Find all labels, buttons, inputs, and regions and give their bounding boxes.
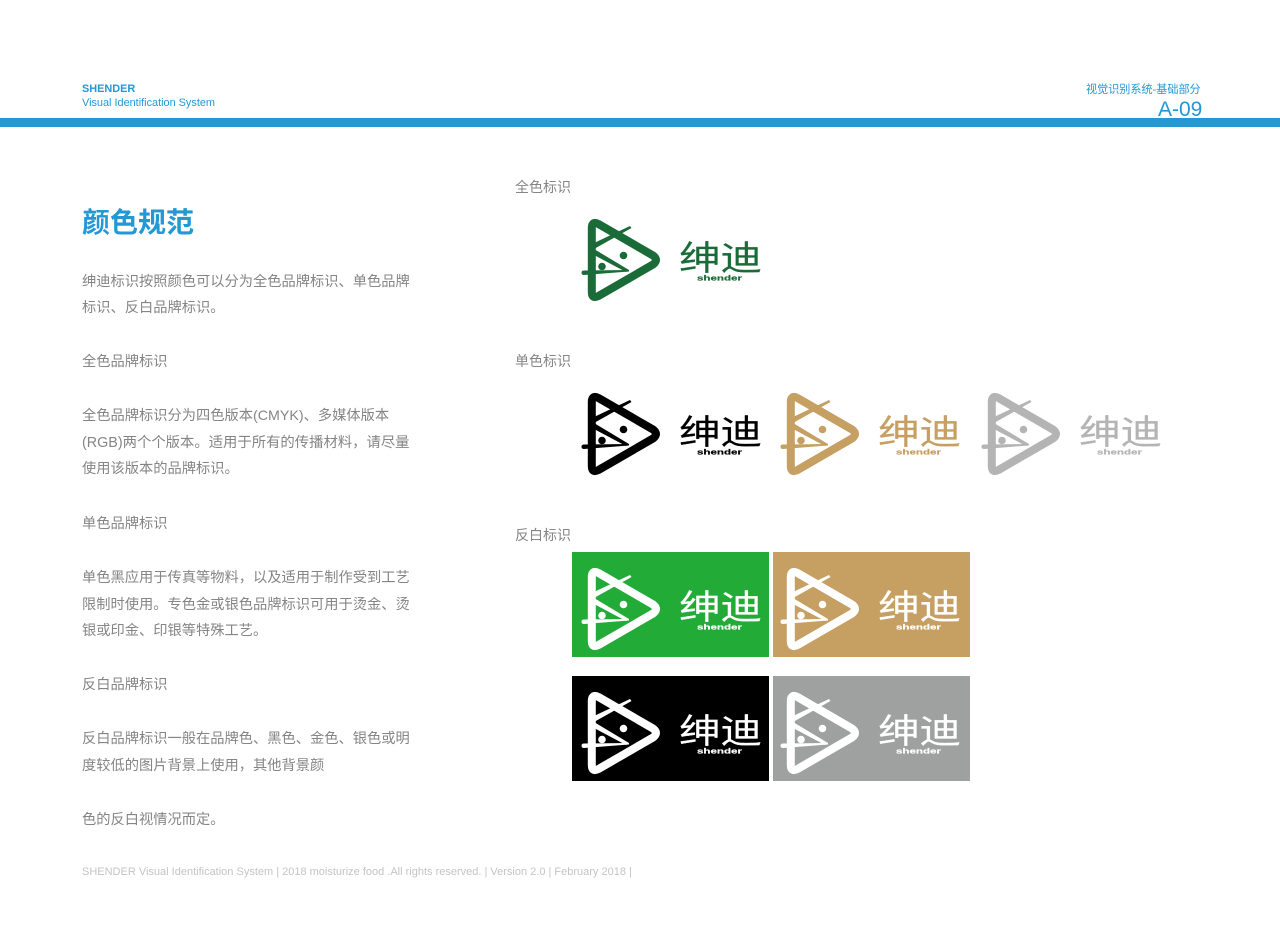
header: brand name bbox=[82, 83, 215, 108]
body text: 绅迪标识按照颜色可以分为全色品牌标识、单色品牌 bbox=[82, 274, 410, 290]
body text: 标识、反白品牌标识。 bbox=[82, 300, 225, 316]
reversed logo on silver: 绅迪 bbox=[878, 704, 961, 753]
header: brand name: Visual Identification System bbox=[82, 96, 215, 108]
reversed logo on black bbox=[572, 676, 769, 781]
body text: 单色黑应用于传真等物料，以及适用于制作受到工艺 bbox=[82, 570, 410, 586]
heading: full colour logo: 全色标识 bbox=[515, 179, 571, 195]
reversed logo on silver: shender bbox=[896, 746, 941, 756]
body text: 全色品牌标识 bbox=[82, 354, 168, 370]
body text: 度较低的图片背景上使用，其他背景颜 bbox=[82, 758, 324, 774]
body text: 单色品牌标识 bbox=[82, 516, 168, 532]
logo: single colour gold: shender bbox=[896, 448, 941, 456]
header: page number: A-09 bbox=[1158, 98, 1202, 121]
reversed logo on green bbox=[572, 552, 769, 657]
reversed logo on gold: shender bbox=[896, 622, 941, 632]
logo: full colour green bbox=[582, 223, 762, 297]
logo: single colour black: 绅迪 bbox=[679, 405, 762, 454]
heading: single colour logo: 单色标识 bbox=[515, 353, 571, 369]
logo: single colour silver: 绅迪 bbox=[1079, 405, 1162, 454]
body text: 银或印金、印银等特殊工艺。 bbox=[82, 623, 267, 639]
body text: (RGB)两个个版本。适用于所有的传播材料，请尽量 bbox=[82, 435, 410, 451]
logo: single colour black: shender bbox=[697, 448, 742, 456]
title: 颜色规范 bbox=[82, 207, 194, 238]
header: section name: 视觉识别系统-基础部分 bbox=[1086, 84, 1201, 96]
logo: single colour black bbox=[582, 397, 762, 471]
logo: full colour green: shender bbox=[697, 274, 742, 282]
reversed logo on silver bbox=[773, 676, 970, 781]
header: brand name: SHENDER bbox=[82, 83, 135, 95]
body text bbox=[82, 274, 410, 828]
heading: reversed logo: 反白标识 bbox=[515, 527, 571, 543]
reversed logo on green: shender bbox=[697, 622, 742, 632]
logo: single colour silver: shender bbox=[1097, 448, 1142, 456]
body text: 全色品牌标识分为四色版本(CMYK)、多媒体版本 bbox=[82, 408, 389, 424]
reversed logo on green: 绅迪 bbox=[679, 580, 762, 629]
reversed logo on black: 绅迪 bbox=[679, 704, 762, 753]
header bar bbox=[0, 118, 1280, 127]
body text: 使用该版本的品牌标识。 bbox=[82, 461, 239, 477]
body text: 反白品牌标识一般在品牌色、黑色、金色、银色或明 bbox=[82, 731, 410, 747]
reversed logo on black: shender bbox=[697, 746, 742, 756]
logo: single colour silver bbox=[982, 397, 1162, 471]
footer text: SHENDER Visual Identification System | 2018 moisturize food .All rights reserved. | Version 2.0 | February 2018 | bbox=[82, 866, 632, 878]
body text: 色的反白视情况而定。 bbox=[82, 812, 225, 828]
logo: single colour gold bbox=[780, 397, 961, 471]
logo: full colour green: 绅迪 bbox=[679, 231, 762, 280]
body text: 反白品牌标识 bbox=[82, 677, 168, 693]
reversed logo on gold: 绅迪 bbox=[878, 580, 961, 629]
reversed logo on gold bbox=[773, 552, 970, 657]
body text: 限制时使用。专色金或银色品牌标识可用于烫金、烫 bbox=[82, 597, 410, 613]
logo: single colour gold: 绅迪 bbox=[878, 405, 961, 454]
